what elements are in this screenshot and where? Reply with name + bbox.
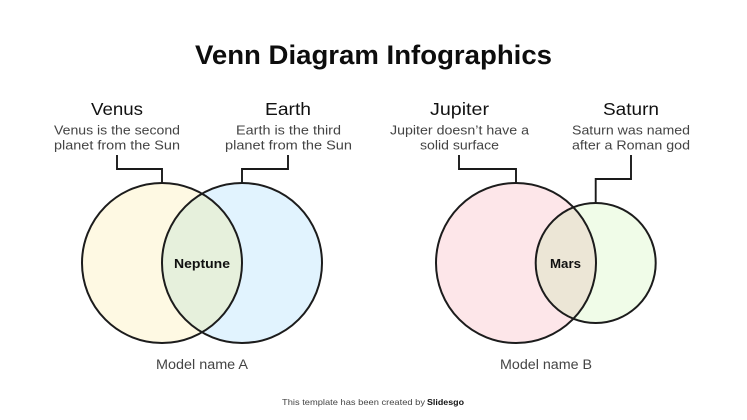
connector: Venus <box>117 155 162 183</box>
heading: Earth: Earth <box>265 99 311 119</box>
text: Venus description: Venus is the second <box>54 122 180 138</box>
panel: model A venn diagram <box>82 183 322 372</box>
connector: Saturn <box>596 155 631 203</box>
text: Earth description: Earth is the third <box>236 122 341 138</box>
text: Jupiter description: solid surface <box>420 138 499 152</box>
heading: Venus: Venus <box>91 99 143 119</box>
panel: model B venn diagram <box>436 183 656 372</box>
heading: Saturn: Saturn <box>603 99 659 119</box>
text: Jupiter description <box>390 122 530 152</box>
connector: Jupiter <box>459 155 516 183</box>
caption: Model name A: Model name A <box>156 357 248 372</box>
callout: Venus <box>54 99 180 183</box>
title: Venn Diagram Infographics <box>195 40 552 70</box>
overlap label: Neptune: Neptune <box>174 256 230 271</box>
caption: Model name B: Model name B <box>500 357 592 372</box>
callout: Jupiter <box>390 99 530 183</box>
connector: Earth <box>242 155 288 183</box>
footer credit: Slidesgo <box>427 397 464 407</box>
outlines: model B circles <box>436 183 656 343</box>
text: Saturn description: after a Roman god <box>572 138 690 152</box>
text: Earth description <box>225 122 352 152</box>
callout: Saturn <box>572 99 690 203</box>
circle: Saturn <box>536 203 656 323</box>
circle: Earth <box>162 183 322 343</box>
callout: Earth <box>225 99 352 183</box>
circle: Jupiter <box>436 183 596 343</box>
heading: Jupiter: Jupiter <box>430 99 489 119</box>
text: Saturn description <box>572 122 690 152</box>
overlap: Jupiter and Saturn <box>536 208 595 318</box>
infographic canvas <box>54 44 690 406</box>
text: Jupiter description: Jupiter doesn’t have a <box>390 122 530 138</box>
text: Venus description: planet from the Sun <box>54 138 180 152</box>
outlines: model A circles <box>82 183 322 343</box>
overlap: Venus and Earth <box>163 195 241 331</box>
text: Venus description <box>54 122 180 152</box>
circle: Venus <box>82 183 242 343</box>
text: Saturn description: Saturn was named <box>572 122 690 138</box>
footer credit: This template has been created by <box>282 397 426 407</box>
overlap label: Mars: Mars <box>550 256 581 271</box>
text: Earth description: planet from the Sun <box>225 138 352 152</box>
